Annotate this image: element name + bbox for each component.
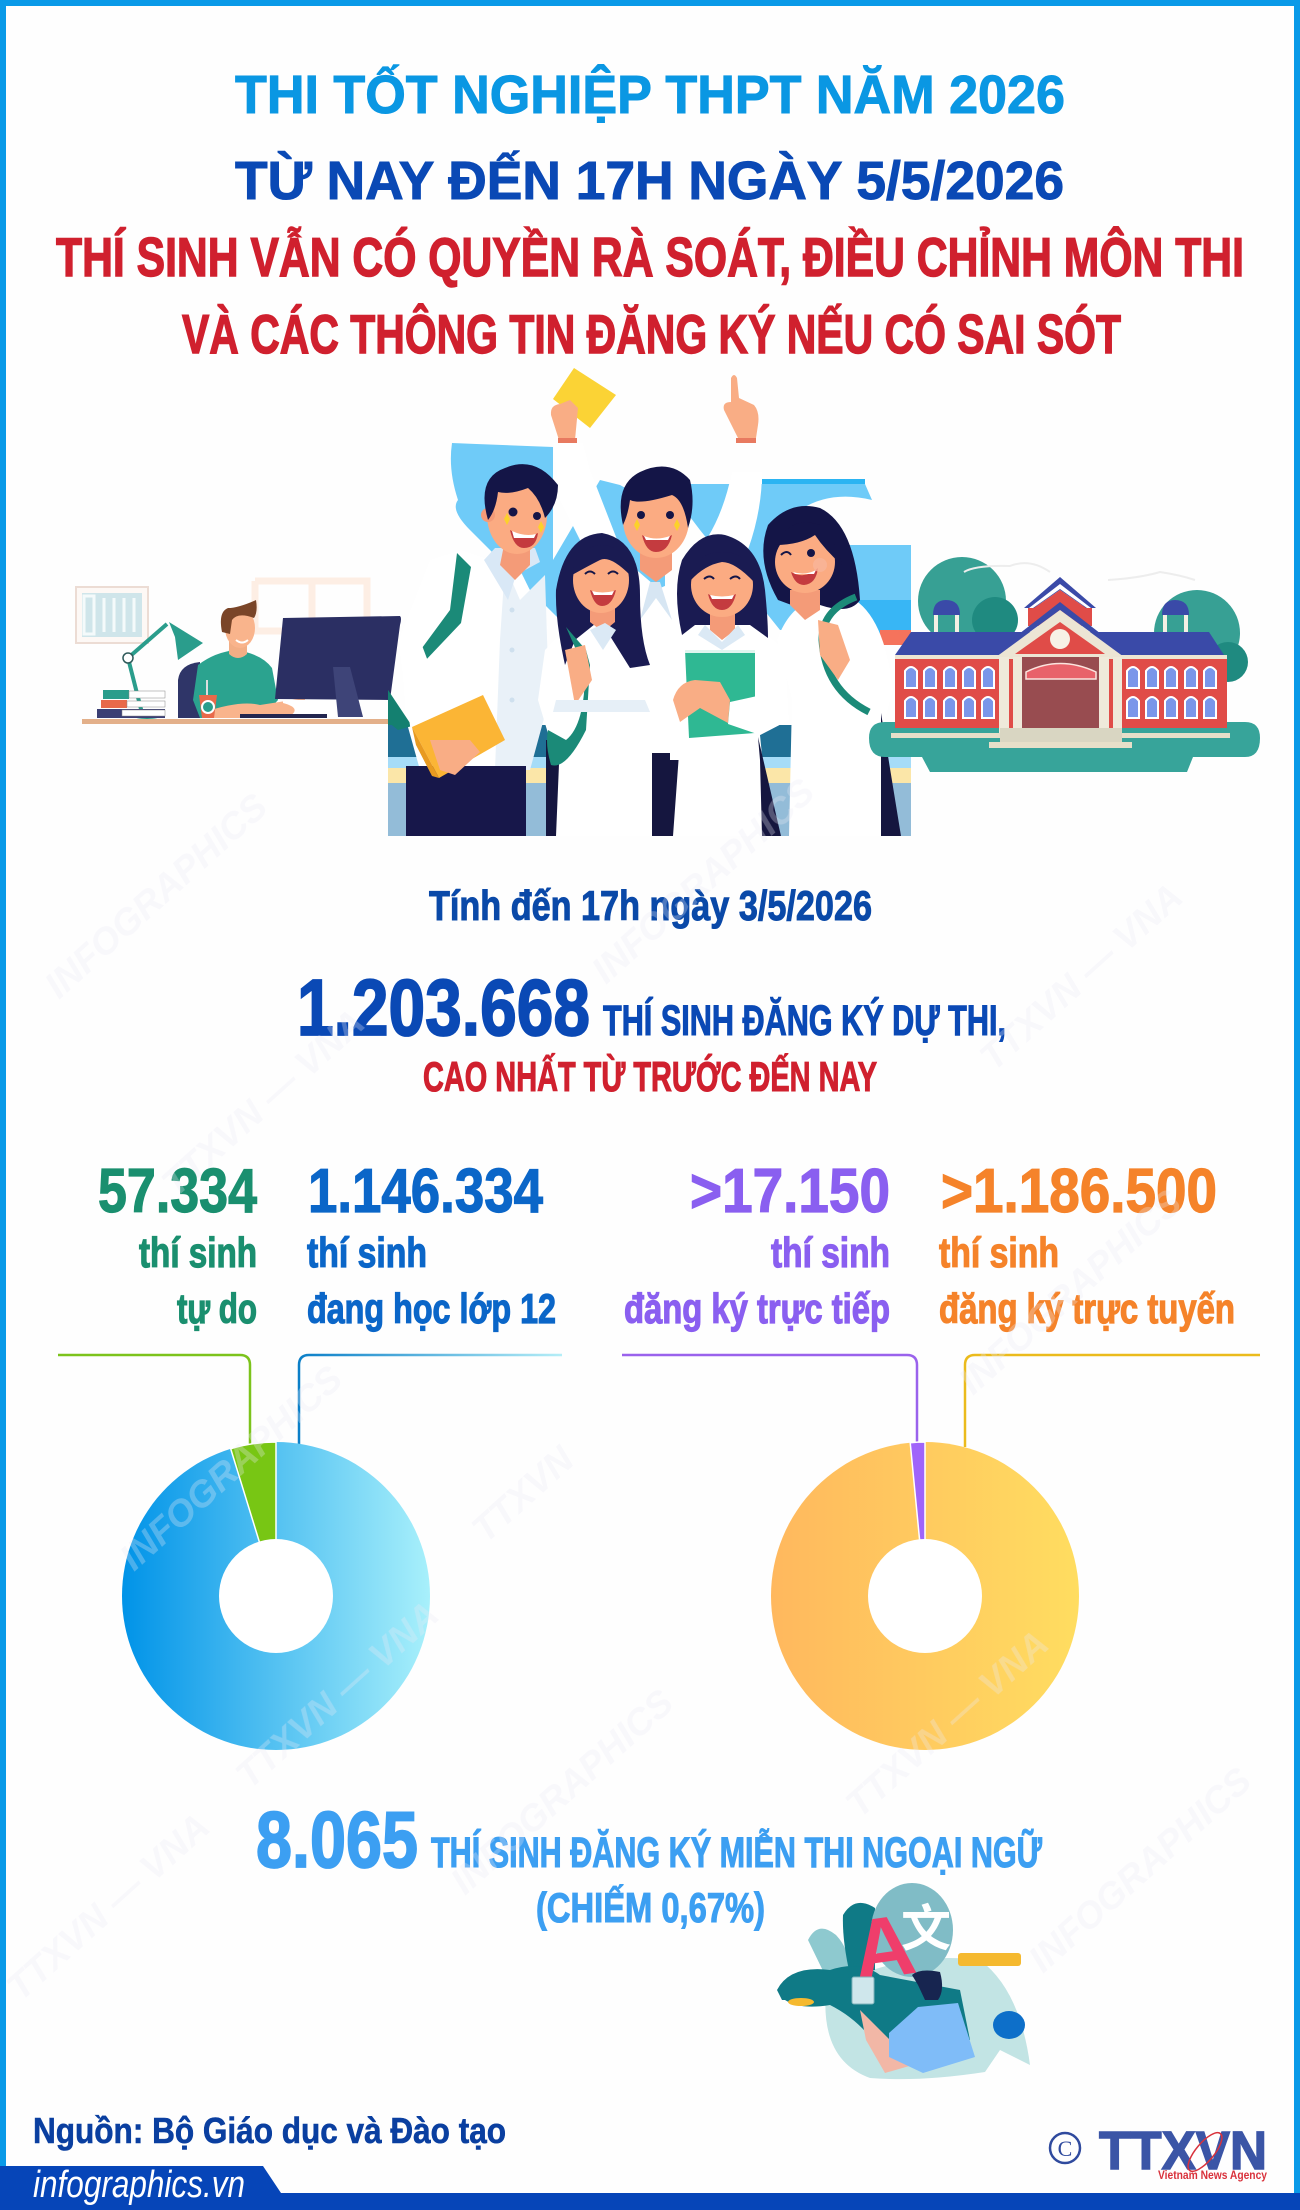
TTXVN logo: Vietnam News Agency <box>1158 2168 1267 2182</box>
stat: free candidates: 57.334 <box>98 1157 257 1226</box>
wall calendar <box>76 587 148 643</box>
girl 1: left-centre <box>538 533 655 836</box>
stat: direct registration: >17.150 <box>690 1157 890 1226</box>
books <box>97 690 165 718</box>
exemption label: THÍ SINH ĐĂNG KÝ MIỄN THI NGOẠI NGỮ <box>431 1828 1042 1877</box>
windows <box>905 667 1216 718</box>
boy 2: centre, arms raised <box>553 443 762 836</box>
total number: 1.203.668 <box>297 963 590 1052</box>
clouds <box>964 563 1195 580</box>
illustration: person with translation bubble <box>777 1883 1030 2079</box>
title block <box>56 64 1244 365</box>
steps <box>891 728 1230 748</box>
roof <box>895 632 1224 655</box>
chair <box>178 662 200 718</box>
person <box>860 2010 930 2073</box>
date line: Tính đến 17h ngày 3/5/2026 <box>429 882 872 929</box>
columns <box>999 657 1122 744</box>
stat: grade 12 candidates: thí sinh <box>307 1229 427 1276</box>
phone <box>852 1977 874 2004</box>
stat: online registration: thí sinh <box>939 1229 1059 1276</box>
domes <box>933 600 1189 635</box>
donut chart: registration method <box>771 1442 1079 1750</box>
pencil <box>958 1953 1021 1966</box>
exemption share: (CHIẾM 0,67%) <box>536 1884 765 1931</box>
girl 2: centre <box>652 534 789 836</box>
title line 1: THI TỐT NGHIỆP THPT NĂM 2026 <box>235 64 1065 125</box>
illustration: students <box>388 368 911 836</box>
raised right hand pointing up <box>724 375 758 443</box>
watermarks: TTXVN — VNA <box>154 1002 372 1204</box>
stat: direct registration: thí sinh <box>771 1229 890 1276</box>
watermarks: INFOGRAPHICS <box>951 1181 1189 1402</box>
stat: grade 12 candidates: đang học lớp 12 <box>307 1285 556 1332</box>
translation bubble <box>871 1883 953 1977</box>
backdrop <box>388 443 911 836</box>
total label: THÍ SINH ĐĂNG KÝ DỰ THI, <box>603 997 1006 1045</box>
man <box>193 600 305 718</box>
exemption number: 8.065 <box>256 1795 418 1884</box>
watermarks: INFOGRAPHICS <box>443 1681 681 1902</box>
footer bar <box>0 2164 1300 2210</box>
trees <box>918 557 1248 682</box>
lawn <box>869 722 1260 772</box>
connector lines <box>58 1355 1260 1447</box>
letter A: A <box>846 1896 921 2000</box>
highest note: CAO NHẤT TỪ TRƯỚC ĐẾN NAY <box>423 1052 877 1100</box>
monitor <box>240 616 401 718</box>
clock <box>993 2011 1025 2039</box>
stat: online registration <box>939 1157 1235 1332</box>
illustration: school building <box>869 557 1260 772</box>
raised left hand with yellow card <box>551 368 616 443</box>
watermarks <box>0 770 1259 2008</box>
watermarks: TTXVN <box>464 1437 582 1550</box>
wings <box>895 658 1227 728</box>
watermarks: TTXVN — VNA <box>228 1594 446 1796</box>
TTXVN logo: TTXVN <box>1099 2121 1267 2181</box>
cup <box>199 680 217 718</box>
stat: grade 12 candidates <box>307 1157 556 1332</box>
stat: free candidates: thí sinh <box>139 1229 257 1276</box>
door <box>1022 657 1099 728</box>
TTXVN logo: C <box>1058 2136 1072 2161</box>
stat: free candidates: tự do <box>177 1285 257 1332</box>
stat: free candidates <box>98 1157 257 1332</box>
site name: infographics.vn <box>33 2164 245 2206</box>
lamp <box>123 622 203 719</box>
watermarks: INFOGRAPHICS <box>584 770 822 991</box>
boy 1: left <box>388 464 558 836</box>
stat: direct registration: đăng ký trực tiếp <box>624 1285 890 1332</box>
title line 2: TỪ NAY ĐẾN 17H NGÀY 5/5/2026 <box>235 151 1064 211</box>
watermarks: TTXVN — VNA <box>972 876 1190 1078</box>
window <box>255 581 367 641</box>
watermarks: INFOGRAPHICS <box>112 1357 350 1578</box>
girl 3: right <box>763 506 901 836</box>
exemption stat <box>256 1795 1042 1931</box>
donut chart: candidates by status <box>122 1442 430 1750</box>
stat: direct registration <box>624 1157 890 1332</box>
source: Nguồn: Bộ Giáo dục và Đào tạo <box>33 2110 506 2151</box>
Chinese character: 文 <box>901 1889 951 1961</box>
watermarks: TTXVN — VNA <box>838 1623 1056 1825</box>
upper gable <box>1024 577 1096 626</box>
illustration: man at desk <box>76 581 437 724</box>
desk <box>82 719 437 724</box>
watermarks: INFOGRAPHICS <box>37 785 275 1006</box>
watermarks: TTXVN — VNA <box>0 1806 217 2008</box>
coin <box>788 1998 814 2006</box>
main gable <box>992 602 1128 657</box>
headline stat <box>297 963 1006 1100</box>
stat: grade 12 candidates: 1.146.334 <box>308 1157 543 1226</box>
stat: online registration: >1.186.500 <box>941 1157 1217 1226</box>
watermarks: INFOGRAPHICS <box>1021 1759 1259 1980</box>
